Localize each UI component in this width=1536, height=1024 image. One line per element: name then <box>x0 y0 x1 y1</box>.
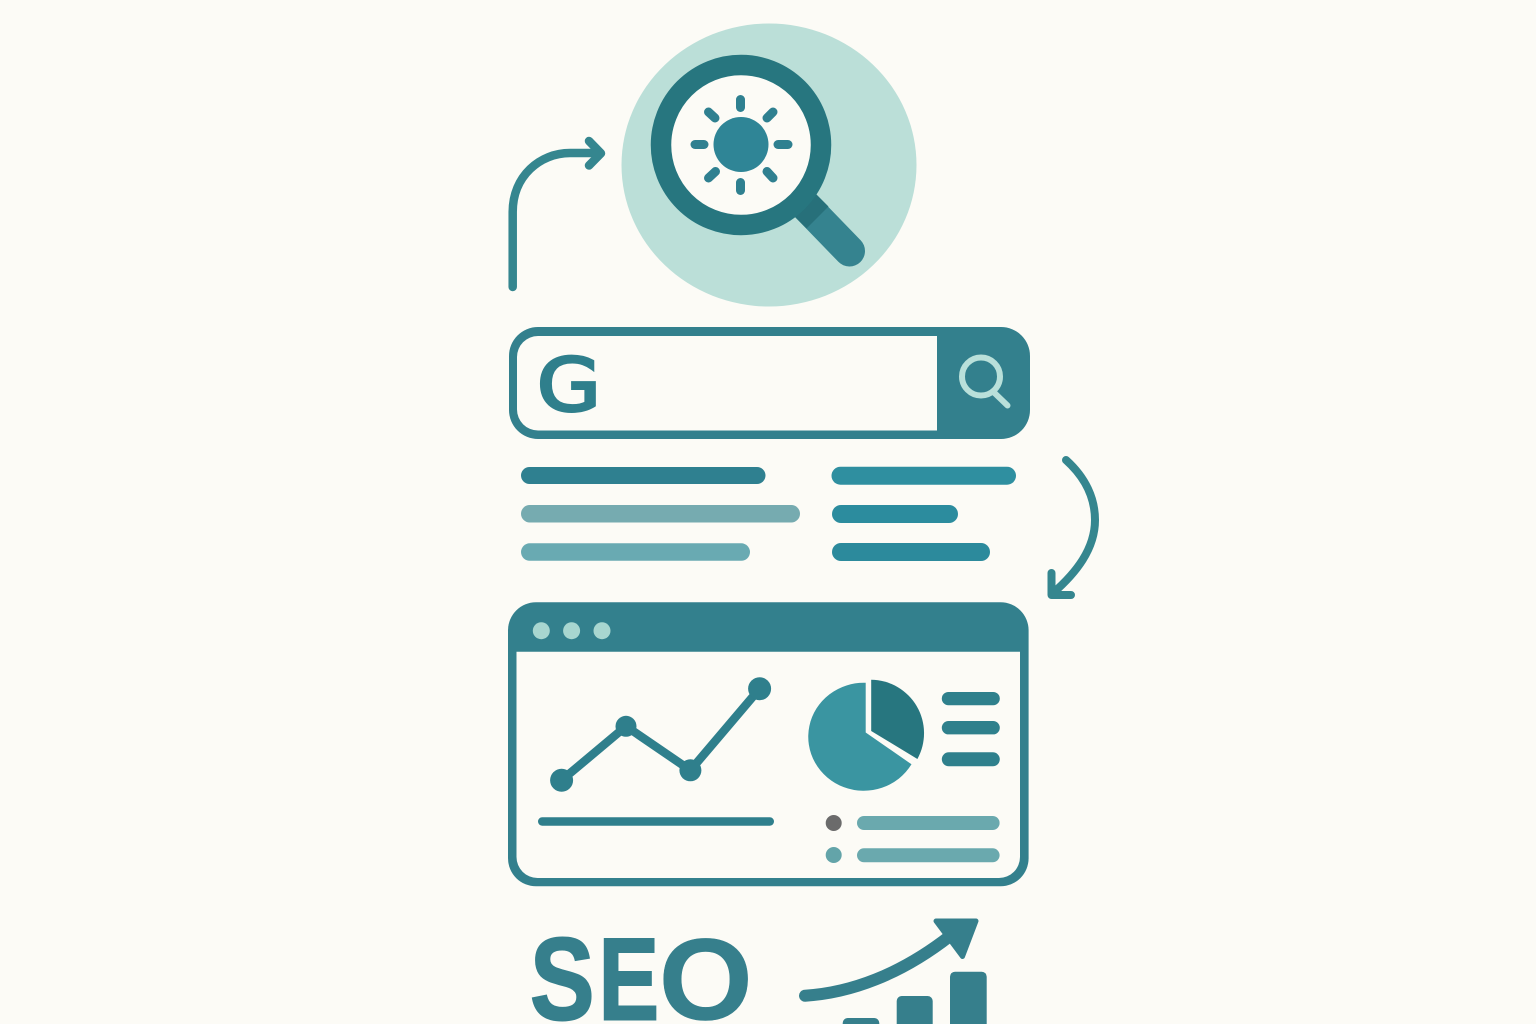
icon: magnifying glass in circle <box>622 24 916 306</box>
SEO heading <box>530 914 753 1024</box>
growth arrow and bars <box>805 921 987 1024</box>
growth arrow <box>805 921 976 996</box>
pie chart <box>808 680 924 791</box>
search bar frame <box>509 327 1030 439</box>
magnifier lens ring <box>661 65 821 225</box>
rising bars <box>843 972 987 1024</box>
search results: left column <box>521 467 800 561</box>
search input field <box>517 336 937 430</box>
search bar <box>509 327 1030 439</box>
chart baseline <box>538 817 774 826</box>
bottom legend row one <box>826 815 1000 831</box>
icon: sun <box>695 100 788 190</box>
search results: right column <box>832 467 1016 561</box>
browser window dashboard <box>508 602 1029 886</box>
icon: search magnifier <box>962 358 1008 406</box>
pale teal circle <box>622 24 916 306</box>
window control dots <box>533 622 610 639</box>
window frame <box>508 602 1029 886</box>
window content area <box>516 652 1020 878</box>
pie legend bars <box>942 692 1000 766</box>
line chart <box>550 677 771 792</box>
bottom legend row two <box>826 847 1000 863</box>
logo letter G: G <box>537 344 601 428</box>
magnifier handle <box>798 198 850 251</box>
arrow: curved down to dashboard <box>1052 460 1095 595</box>
arrow: up and right to magnifier <box>513 141 601 287</box>
